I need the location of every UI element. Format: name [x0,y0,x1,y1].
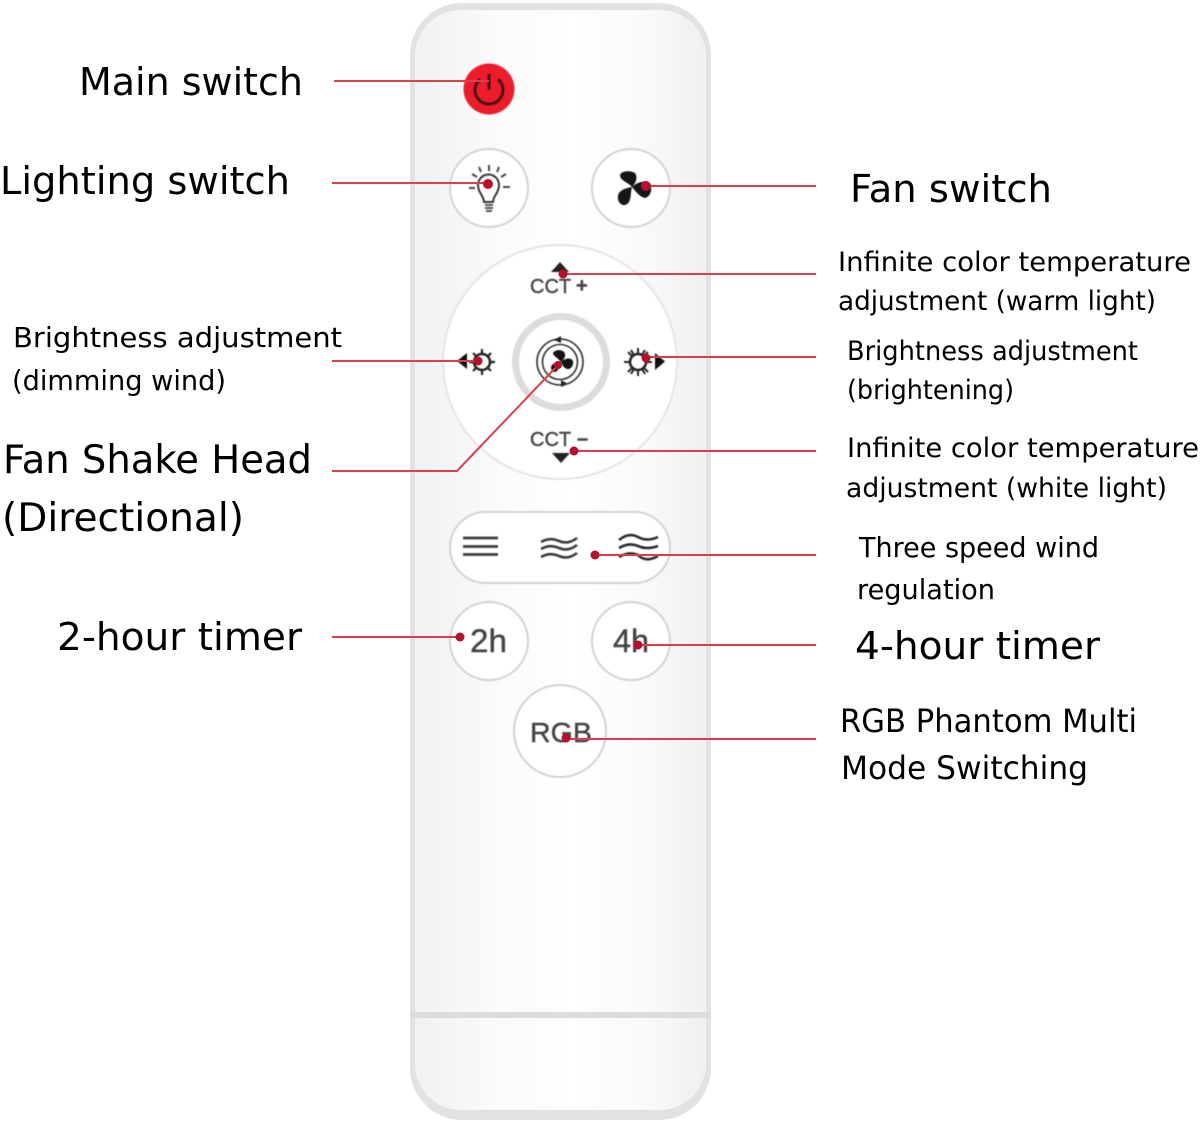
label: wind regulation: Three speed wind [858,531,1099,564]
leader: RGB [562,734,816,742]
label: white light adjustment [846,433,1199,504]
label: dimming adjustment: Brightness adjustment [13,321,342,354]
button: RGB: RGB [530,717,592,748]
label: wind regulation: regulation [857,573,995,606]
label: warm light adjustment: adjustment (warm light) [838,286,1156,317]
icon: CCT minus: – [577,428,588,450]
icon: fan button [592,149,670,227]
icon: lighting button [450,149,528,227]
icon: high speed [619,535,658,559]
label: brightening adjustment [847,336,1138,406]
leader: lighting switch [332,179,493,189]
button: 4h [592,602,670,680]
label: 4-hour timer: 4-hour timer [855,624,1100,668]
wind speed buttons [450,512,670,583]
label: wind regulation [857,531,1099,606]
button: 2h: 2h [470,623,507,659]
icon: low speed [463,538,498,554]
icon: fan oscillation [537,336,583,387]
label: fan switch: Fan switch [850,167,1052,211]
label: lighting switch: Lighting switch [0,159,290,203]
label: 2-hour timer: 2-hour timer [57,615,302,659]
leader: main switch [334,80,489,82]
remote control body [410,3,711,1120]
label: warm light adjustment: Infinite color temperature [838,247,1191,278]
icon: CCT plus [530,262,588,298]
button: RGB [514,685,606,777]
label: RGB mode switching: Mode Switching [841,749,1088,787]
direction pad [443,245,677,479]
label: warm light adjustment [838,247,1191,317]
icon: brighten [624,348,665,376]
leader: CCT minus [570,446,816,456]
leader: 2h timer [332,632,464,642]
label: white light adjustment: adjustment (white light) [846,473,1167,504]
leader: fan switch [641,181,816,191]
button: 4h: 4h [613,623,649,659]
label: main switch: Main switch [79,60,303,104]
icon: CCT plus: CCT [530,276,571,298]
label: fan shake head: (Directional) [2,496,244,541]
label: RGB mode switching [840,702,1137,787]
label: dimming adjustment: (dimming wind) [12,364,226,397]
icon: power button [464,64,514,114]
button: 2h [450,602,528,680]
icon: CCT minus: CCT [530,429,571,451]
label: white light adjustment: Infinite color temperature [847,433,1199,464]
label: fan shake head: Fan Shake Head [3,438,312,483]
label: brightening adjustment: (brightening) [847,375,1014,406]
icon: medium speed [541,538,577,557]
leader: 4h timer [634,640,816,650]
icon: CCT plus: + [576,275,588,297]
label: fan shake head [2,438,312,541]
label: dimming adjustment [12,321,342,397]
label: brightening adjustment: Brightness adjustment [847,336,1138,367]
leader: fan shake head [332,361,562,471]
icon: dim [457,349,495,375]
leader: brightening [642,354,816,362]
leader: CCT plus [558,270,816,278]
icon: CCT minus [530,428,588,463]
label: RGB mode switching: RGB Phantom Multi [840,702,1137,740]
leader: dimming [332,356,482,366]
leader: wind speed [590,550,816,560]
